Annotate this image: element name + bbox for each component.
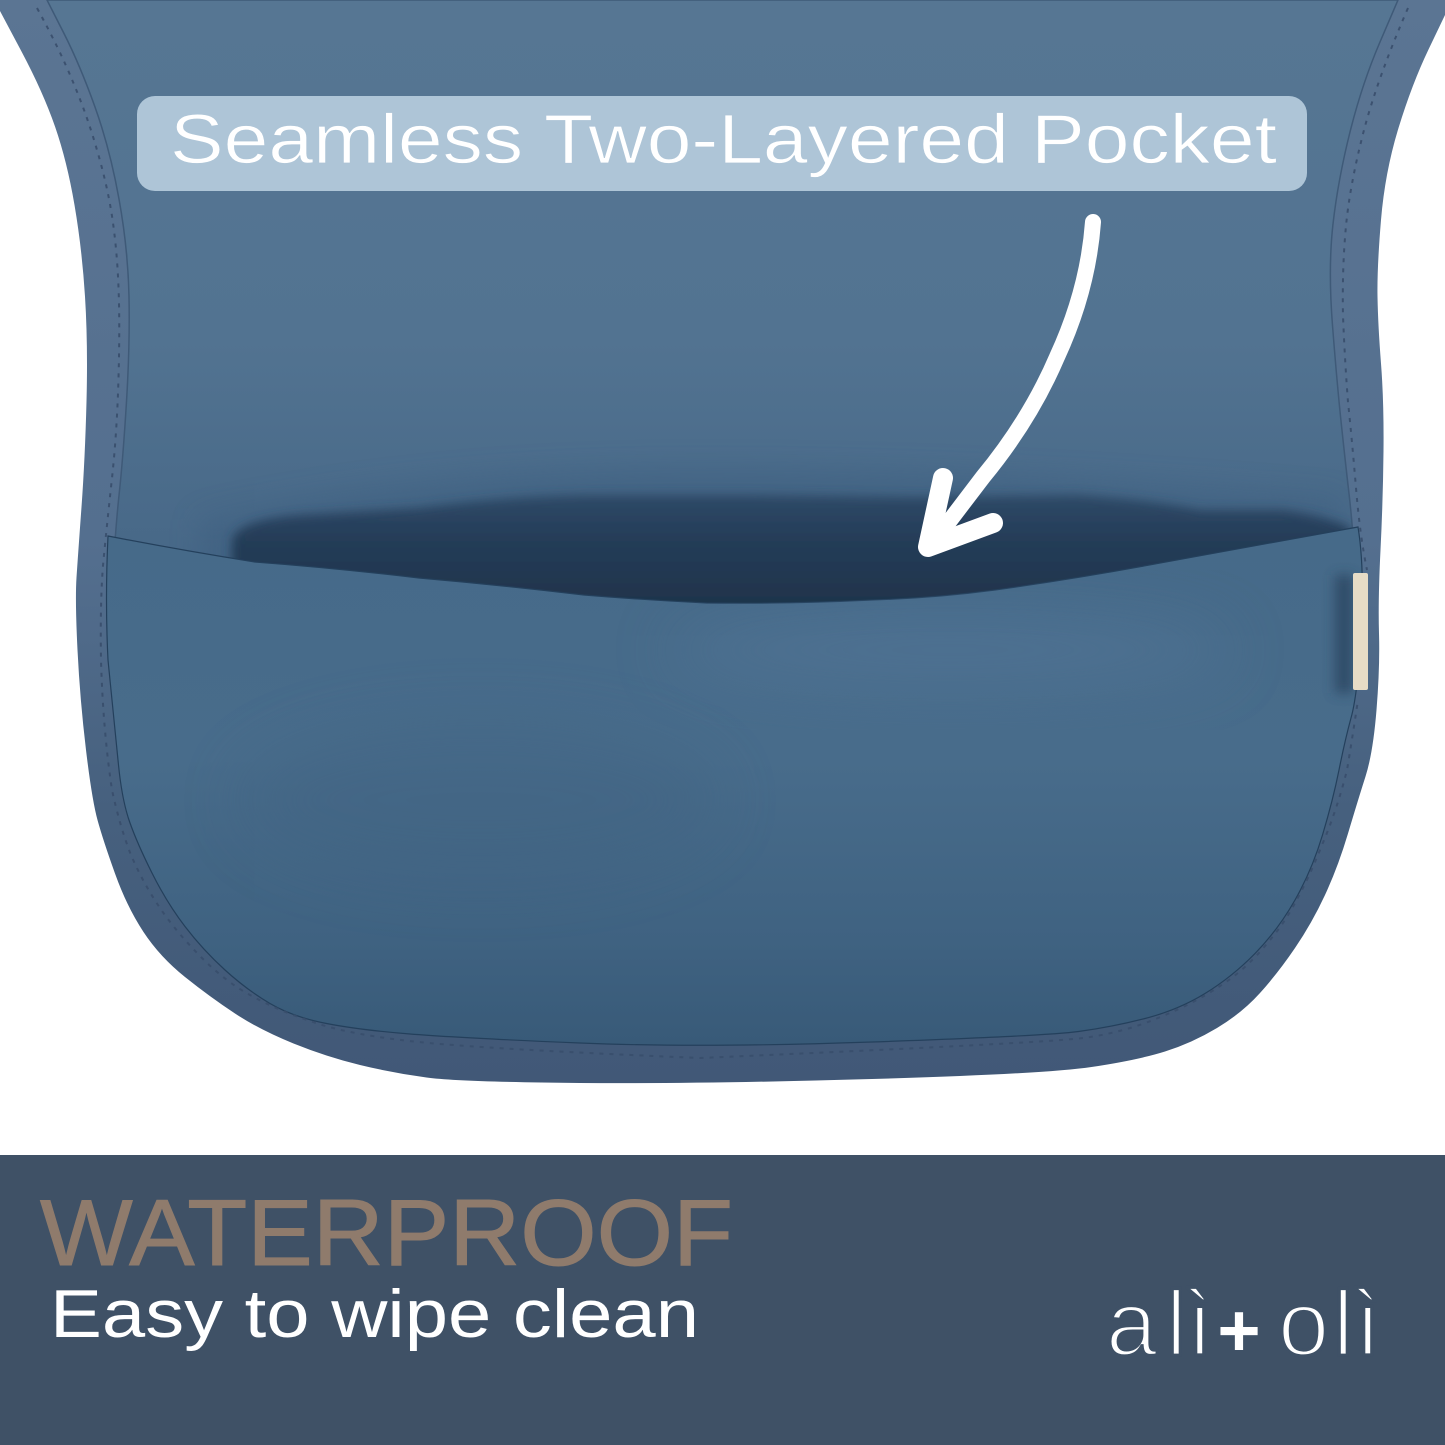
callout pill: seamless two-layered pocket: Seamless Two-Layered Pocket xyxy=(170,100,1277,178)
brand logo: ali + oli xyxy=(1106,1273,1381,1375)
bib fabric trim xyxy=(0,0,1445,1083)
brand logo: ali + oli: olì xyxy=(1278,1273,1381,1375)
upper bib face xyxy=(47,0,1398,620)
brand logo: ali + oli: + xyxy=(1217,1289,1261,1372)
front pocket xyxy=(106,527,1362,1045)
trim stitching xyxy=(37,8,1408,1058)
subheading: easy to wipe clean: Easy to wipe clean xyxy=(50,1276,699,1352)
brand tag on pocket edge xyxy=(1353,573,1368,690)
brand logo: ali + oli: alì xyxy=(1106,1273,1213,1375)
bib photo xyxy=(0,0,1445,1083)
arrow pointing to pocket xyxy=(928,222,1093,547)
shadow inside the pocket opening xyxy=(222,485,1352,603)
heading: waterproof: WATERPROOF xyxy=(40,1180,733,1285)
bottom panel xyxy=(0,1155,1445,1445)
callout pill: seamless two-layered pocket xyxy=(137,96,1307,191)
